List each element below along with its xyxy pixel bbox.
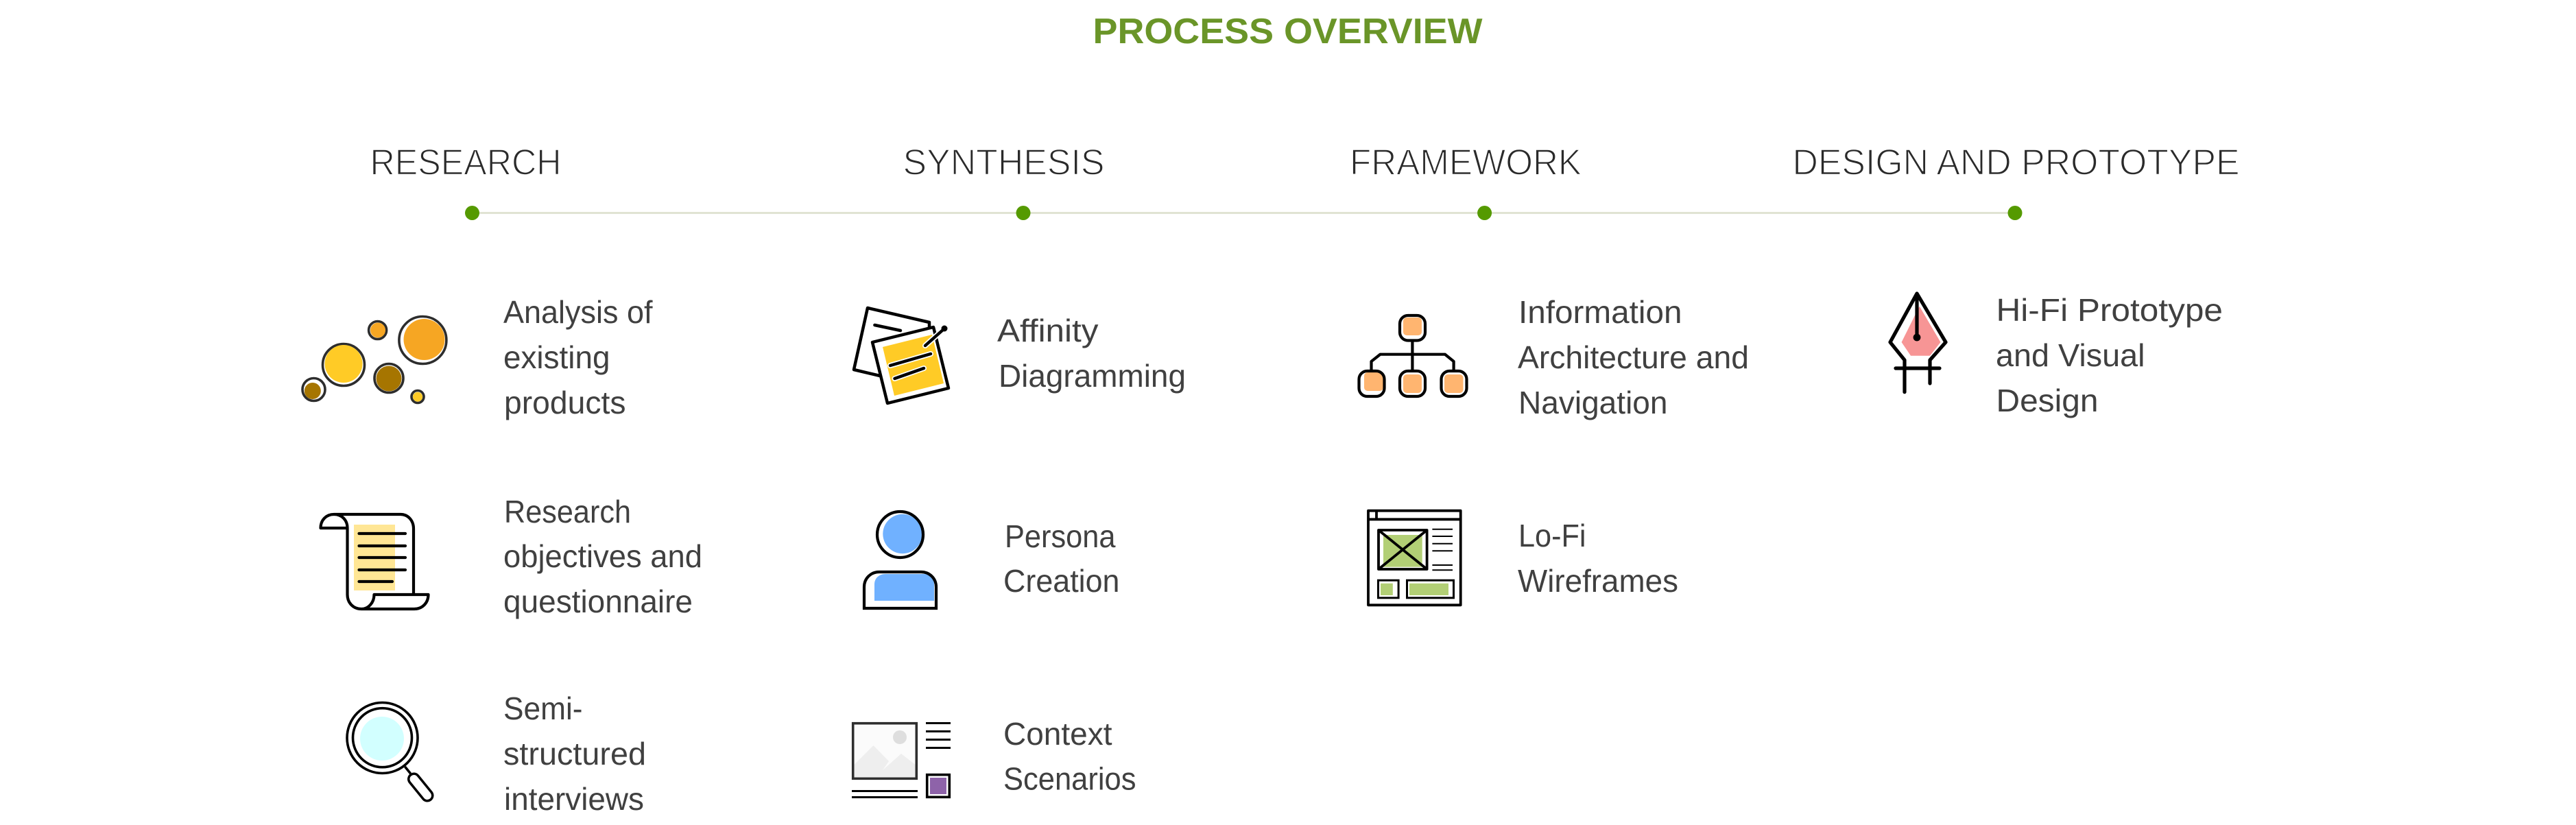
text: analysis of existing products: products xyxy=(504,385,625,420)
text: research objectives and questionnaire xyxy=(503,494,702,619)
panel: synthesis xyxy=(852,143,1186,797)
text: context scenarios: Scenarios xyxy=(1003,761,1136,797)
panel: research xyxy=(302,143,702,817)
text: analysis of existing products xyxy=(503,294,653,420)
heading: synthesis: SYNTHESIS xyxy=(903,143,1104,182)
text: semi-structured interviews: structured xyxy=(503,736,646,772)
text: semi-structured interviews: interviews xyxy=(504,781,644,817)
text: information architecture and navigation: Architecture and xyxy=(1518,339,1749,375)
text: affinity diagramming: Affinity xyxy=(997,313,1099,348)
text: context scenarios xyxy=(1003,716,1136,797)
text: lo-fi wireframes: Wireframes xyxy=(1518,563,1678,599)
text: research objectives and questionnaire: Research xyxy=(504,494,631,529)
text: hi-fi prototype and visual design: and Visual xyxy=(1996,337,2145,373)
timeline dot: research xyxy=(465,206,479,220)
text: research objectives and questionnaire: objectives and xyxy=(503,538,702,574)
text: semi-structured interviews: Semi- xyxy=(503,691,583,726)
icon: affinity notes xyxy=(854,308,949,403)
icon: magnifying glass xyxy=(347,702,427,796)
timeline dot: synthesis xyxy=(1016,206,1030,220)
panel: framework xyxy=(1350,143,1749,605)
title: PROCESS OVERVIEW xyxy=(1093,12,1483,51)
icon: information architecture tree xyxy=(1359,315,1466,396)
text: semi-structured interviews xyxy=(503,691,646,817)
text: research objectives and questionnaire: questionnaire xyxy=(503,584,693,619)
timeline dot: framework xyxy=(1477,206,1492,220)
text: information architecture and navigation: Information xyxy=(1518,294,1682,330)
icon: context scenario layout xyxy=(852,723,951,797)
text: affinity diagramming xyxy=(997,313,1186,394)
text: persona creation: Creation xyxy=(1003,563,1119,599)
heading: design and prototype: DESIGN AND PROTOTYPE xyxy=(1793,143,2240,182)
icon: scroll xyxy=(321,514,428,609)
text: persona creation: Persona xyxy=(1005,518,1116,554)
text: lo-fi wireframes xyxy=(1518,518,1678,599)
text: context scenarios: Context xyxy=(1003,716,1112,752)
text: analysis of existing products: Analysis of xyxy=(503,294,653,330)
panel: design and prototype xyxy=(1793,143,2240,418)
icon: lo-fi wireframe xyxy=(1368,511,1461,605)
text: lo-fi wireframes: Lo-Fi xyxy=(1518,518,1586,553)
timeline line xyxy=(472,212,2015,214)
text: hi-fi prototype and visual design: Hi-Fi Prototype xyxy=(1996,292,2223,328)
text: hi-fi prototype and visual design xyxy=(1996,292,2223,418)
timeline dot: design and prototype xyxy=(2008,206,2022,220)
heading: research: RESEARCH xyxy=(370,143,561,182)
heading: framework: FRAMEWORK xyxy=(1350,143,1582,182)
icon: persona xyxy=(864,512,936,608)
text: hi-fi prototype and visual design: Design xyxy=(1996,383,2099,418)
icon: pen nib xyxy=(1890,294,1946,392)
text: affinity diagramming: Diagramming xyxy=(999,358,1186,394)
text: information architecture and navigation xyxy=(1518,294,1749,420)
text: analysis of existing products: existing xyxy=(503,339,610,375)
text: persona creation xyxy=(1003,518,1119,599)
text: information architecture and navigation: Navigation xyxy=(1518,385,1668,420)
icon: bubbles xyxy=(302,317,446,403)
